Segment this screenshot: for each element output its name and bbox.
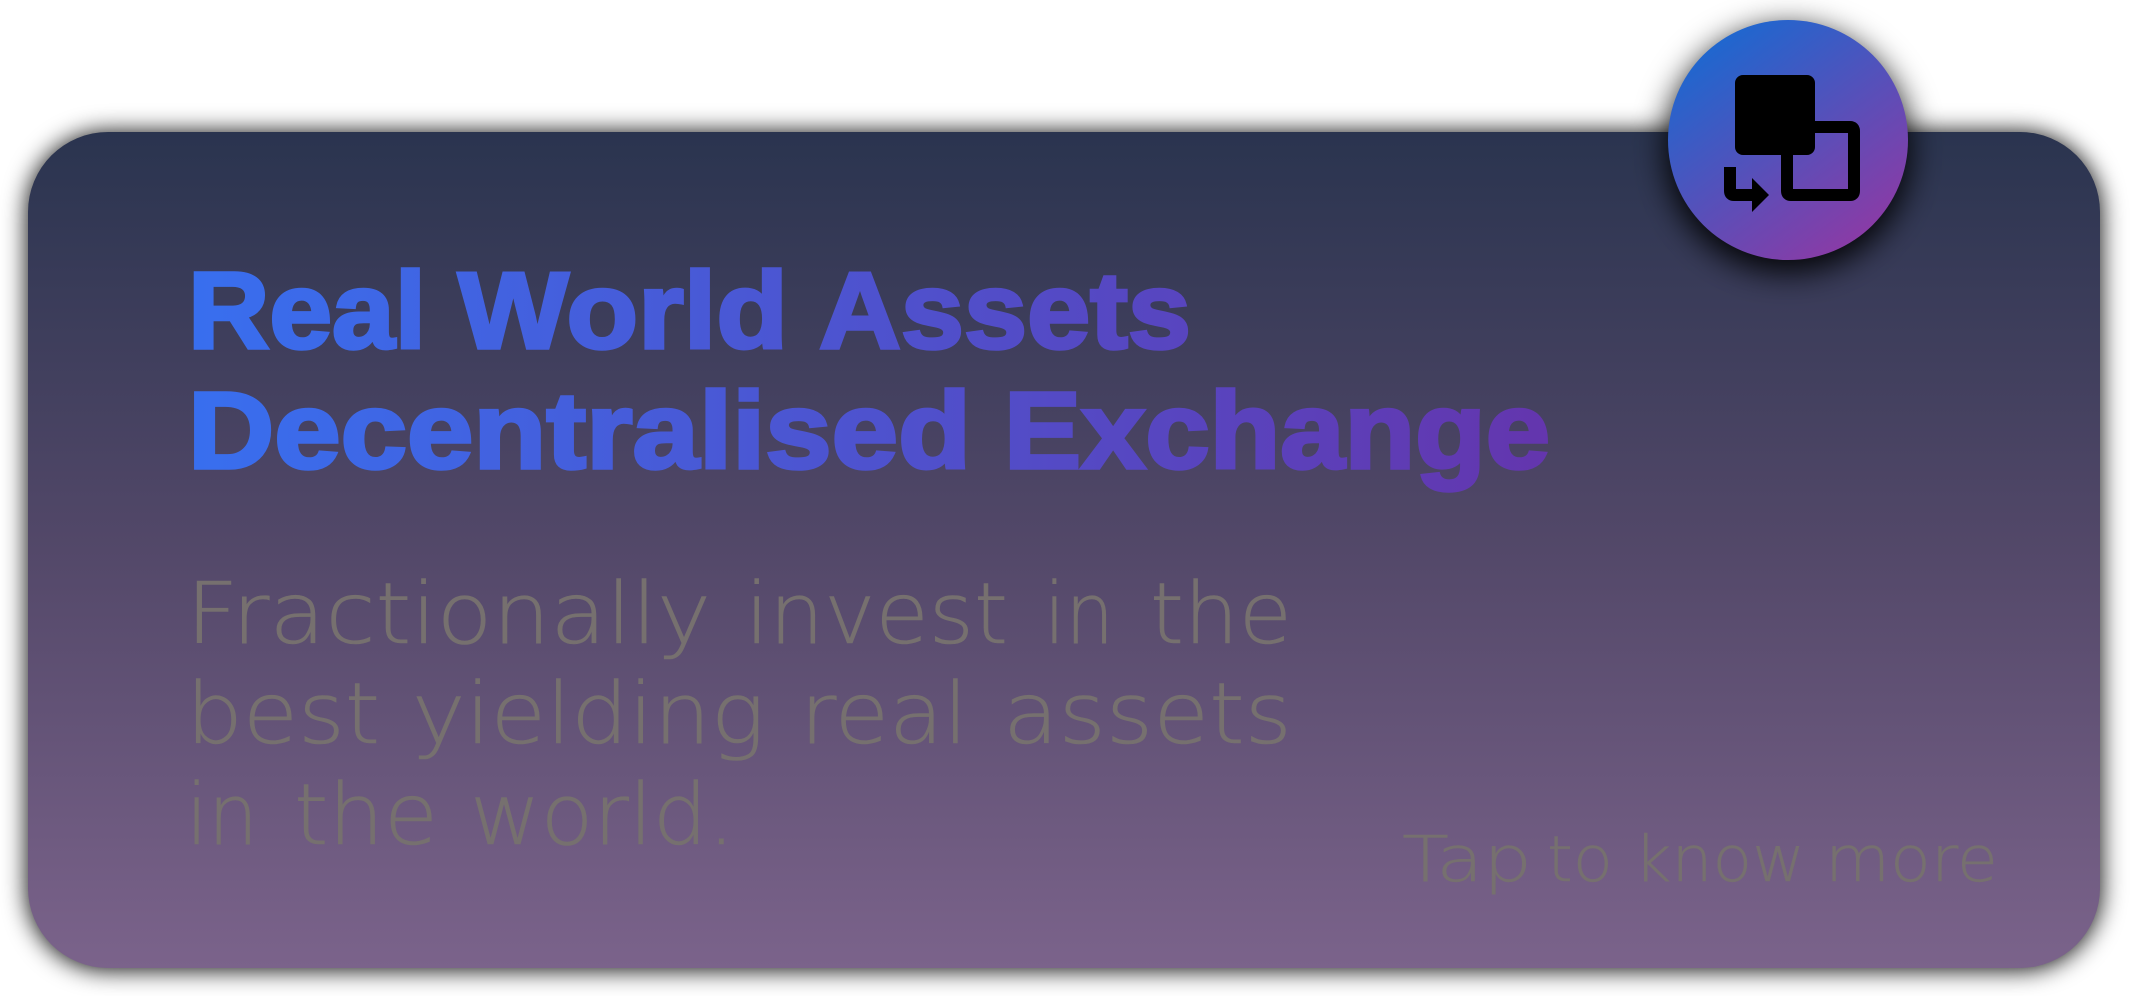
description text: yielding (412, 665, 765, 764)
description text: the (294, 766, 438, 865)
description text: best (186, 665, 380, 764)
description text: in (1044, 565, 1114, 664)
description text: assets (1003, 665, 1292, 764)
icon: swap squares (1730, 75, 1854, 212)
tap to know more label: to (1547, 823, 1613, 896)
description text: in (186, 766, 258, 865)
title (188, 250, 1550, 492)
title: Decentralised (188, 370, 971, 492)
title: Assets (819, 250, 1191, 372)
title: Real (188, 250, 426, 372)
tap to know more label: know (1634, 823, 1805, 896)
description text: real (800, 665, 968, 764)
description text: world. (470, 766, 735, 865)
tap to know more label (1402, 823, 1998, 896)
description text: invest (745, 565, 1008, 664)
tap to know more label: Tap (1402, 823, 1532, 896)
title: Exchange (1004, 370, 1550, 492)
description text: Fractionally (186, 565, 711, 664)
icon badge (1666, 20, 1910, 272)
description text (186, 565, 1292, 865)
title: World (458, 250, 788, 372)
tap to know more label: more (1825, 823, 1998, 896)
description text: the (1150, 565, 1292, 664)
